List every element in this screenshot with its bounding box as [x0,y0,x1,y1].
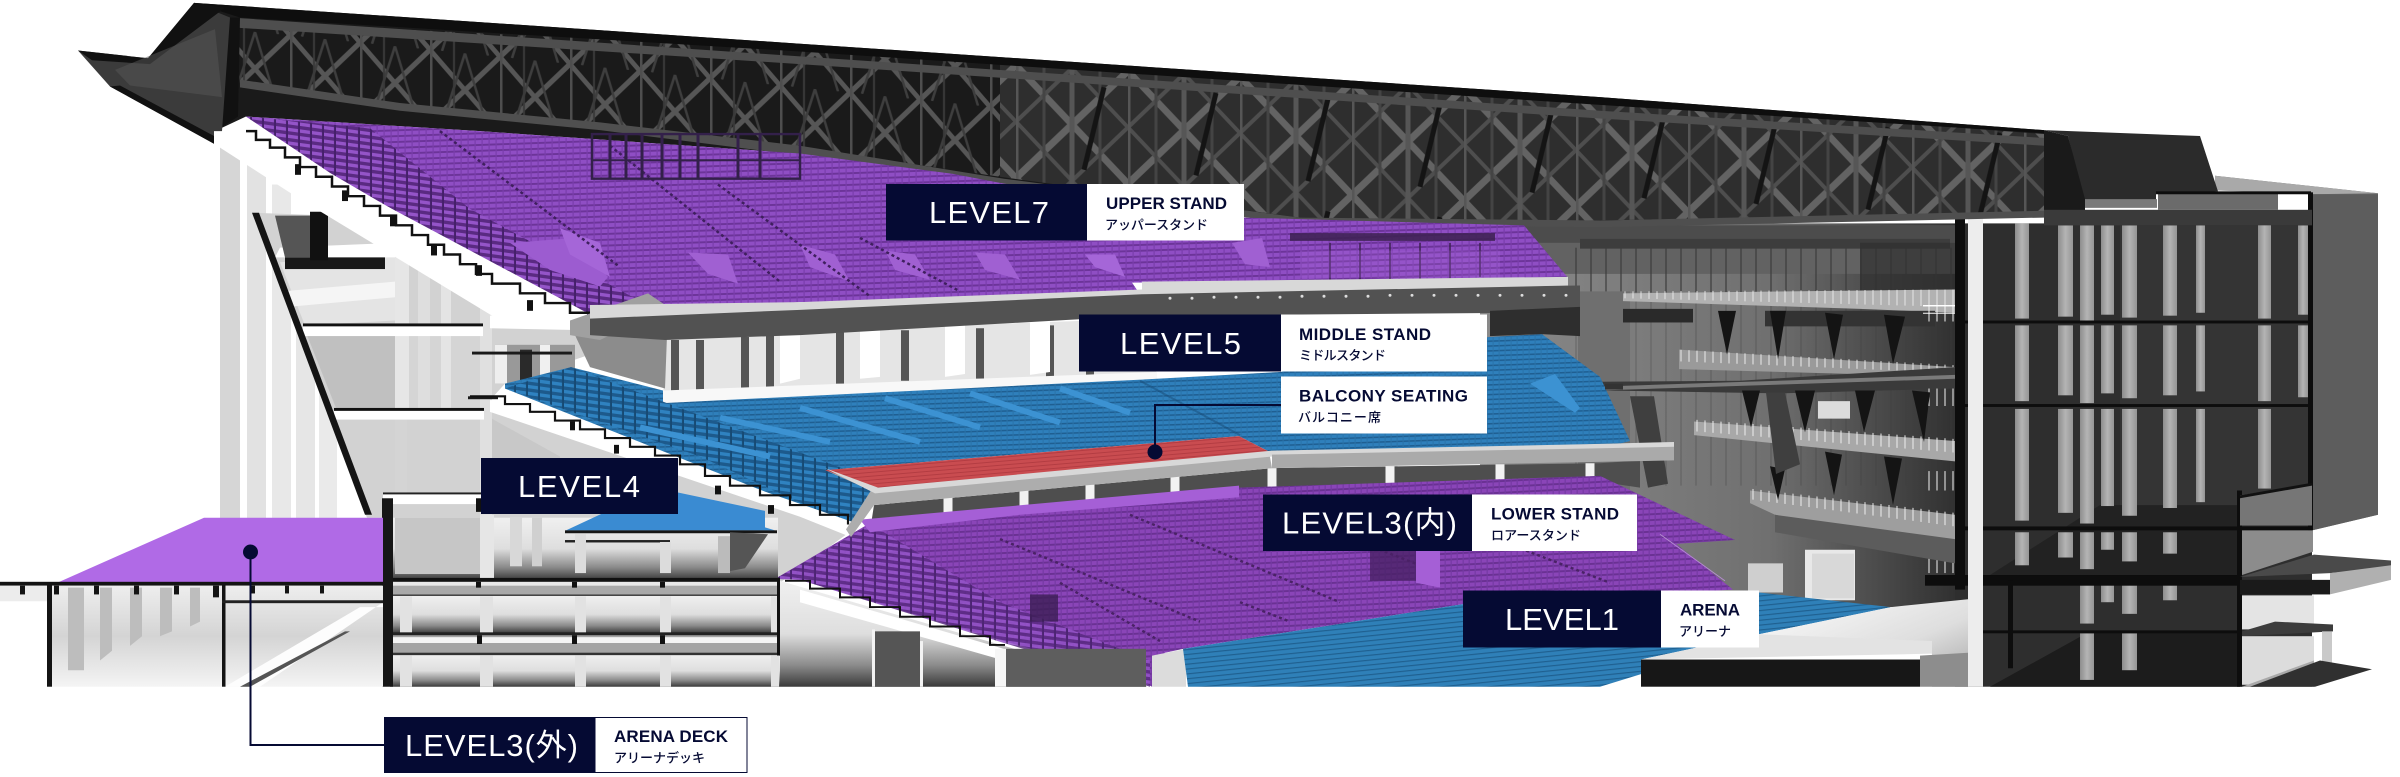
label: level 3 outer arena deck [384,717,747,773]
right building section [1955,176,2378,687]
upper floor zone beneath level 4 [393,515,778,580]
label: level 3 inner lower stand: ロアースタンド [1491,528,1581,543]
callout line: arena deck [243,544,384,745]
dark upper fascia band [590,277,1580,340]
label: level 3 inner lower stand: LEVEL3(内) [1282,506,1457,540]
arena floor seats [1183,592,1891,687]
lower stand gallery band [871,460,1640,525]
balcony seating red block [825,436,1674,537]
building columns [2015,214,2308,680]
label: level 7 upper stand: UPPER STAND [1106,194,1227,213]
label: level 1 arena: ARENA [1680,600,1740,620]
label: level 1 arena [1463,590,1759,648]
arena deck substructure [0,582,383,687]
label: level 5 middle stand: ミドルスタンド [1299,348,1386,363]
upper stand stepped structure [214,131,590,330]
label: level 4: LEVEL4 [518,469,640,504]
roof left eave [78,3,230,144]
roof truss [194,3,2044,227]
building floors [1925,192,2313,687]
label: level 5 middle stand: LEVEL5 [1120,326,1241,361]
label: level 3 inner lower stand: LOWER STAND [1491,504,1619,524]
left concourse interior [252,212,860,687]
arena floor and stage [1641,599,1968,687]
label: level 3 outer arena deck: アリーナデッキ [614,750,705,766]
label: level 7 upper stand: アッパースタンド [1105,218,1208,232]
label: balcony seating: BALCONY SEATING [1299,386,1468,406]
upper stand seats [246,117,1568,315]
label: level 1 arena: LEVEL1 [1505,602,1619,637]
label: level 3 outer arena deck: ARENA DECK [614,727,729,746]
mid stepped structure [470,396,860,537]
label: level 3 inner lower stand [1263,494,1637,551]
label: level 5 middle stand [1079,314,1487,372]
label: level 5 middle stand: MIDDLE STAND [1299,325,1431,344]
label: level 4 [481,458,678,514]
lower left structure below stand [780,581,1186,687]
lower stand seats [775,476,1735,687]
callout line: balcony seating [1148,405,1281,460]
curtains [1718,311,1930,505]
balcony tier wall and boxes [570,293,1157,403]
roof end box [2044,130,2312,225]
label: level 3 outer arena deck: LEVEL3(外) [405,728,578,763]
speakers [1630,392,1800,488]
level 4 deck [565,492,777,573]
interior back wall [1480,223,1960,651]
exterior columns [220,146,337,520]
label: level 1 arena: アリーナ [1679,624,1731,639]
diagonal black wall [252,213,372,515]
label: balcony seating [1281,376,1487,434]
arena deck purple [55,518,383,584]
label: balcony seating: バルコニー席 [1298,410,1381,425]
label: level 7 upper stand: LEVEL7 [929,195,1049,230]
central white column [1968,216,1983,687]
left floor slabs [303,323,572,504]
label: level 7 upper stand [886,184,1244,240]
catwalks [1600,289,1955,573]
outer right annex [2240,483,2391,687]
concrete lower floors [382,498,780,687]
middle stand seats [505,334,1630,525]
